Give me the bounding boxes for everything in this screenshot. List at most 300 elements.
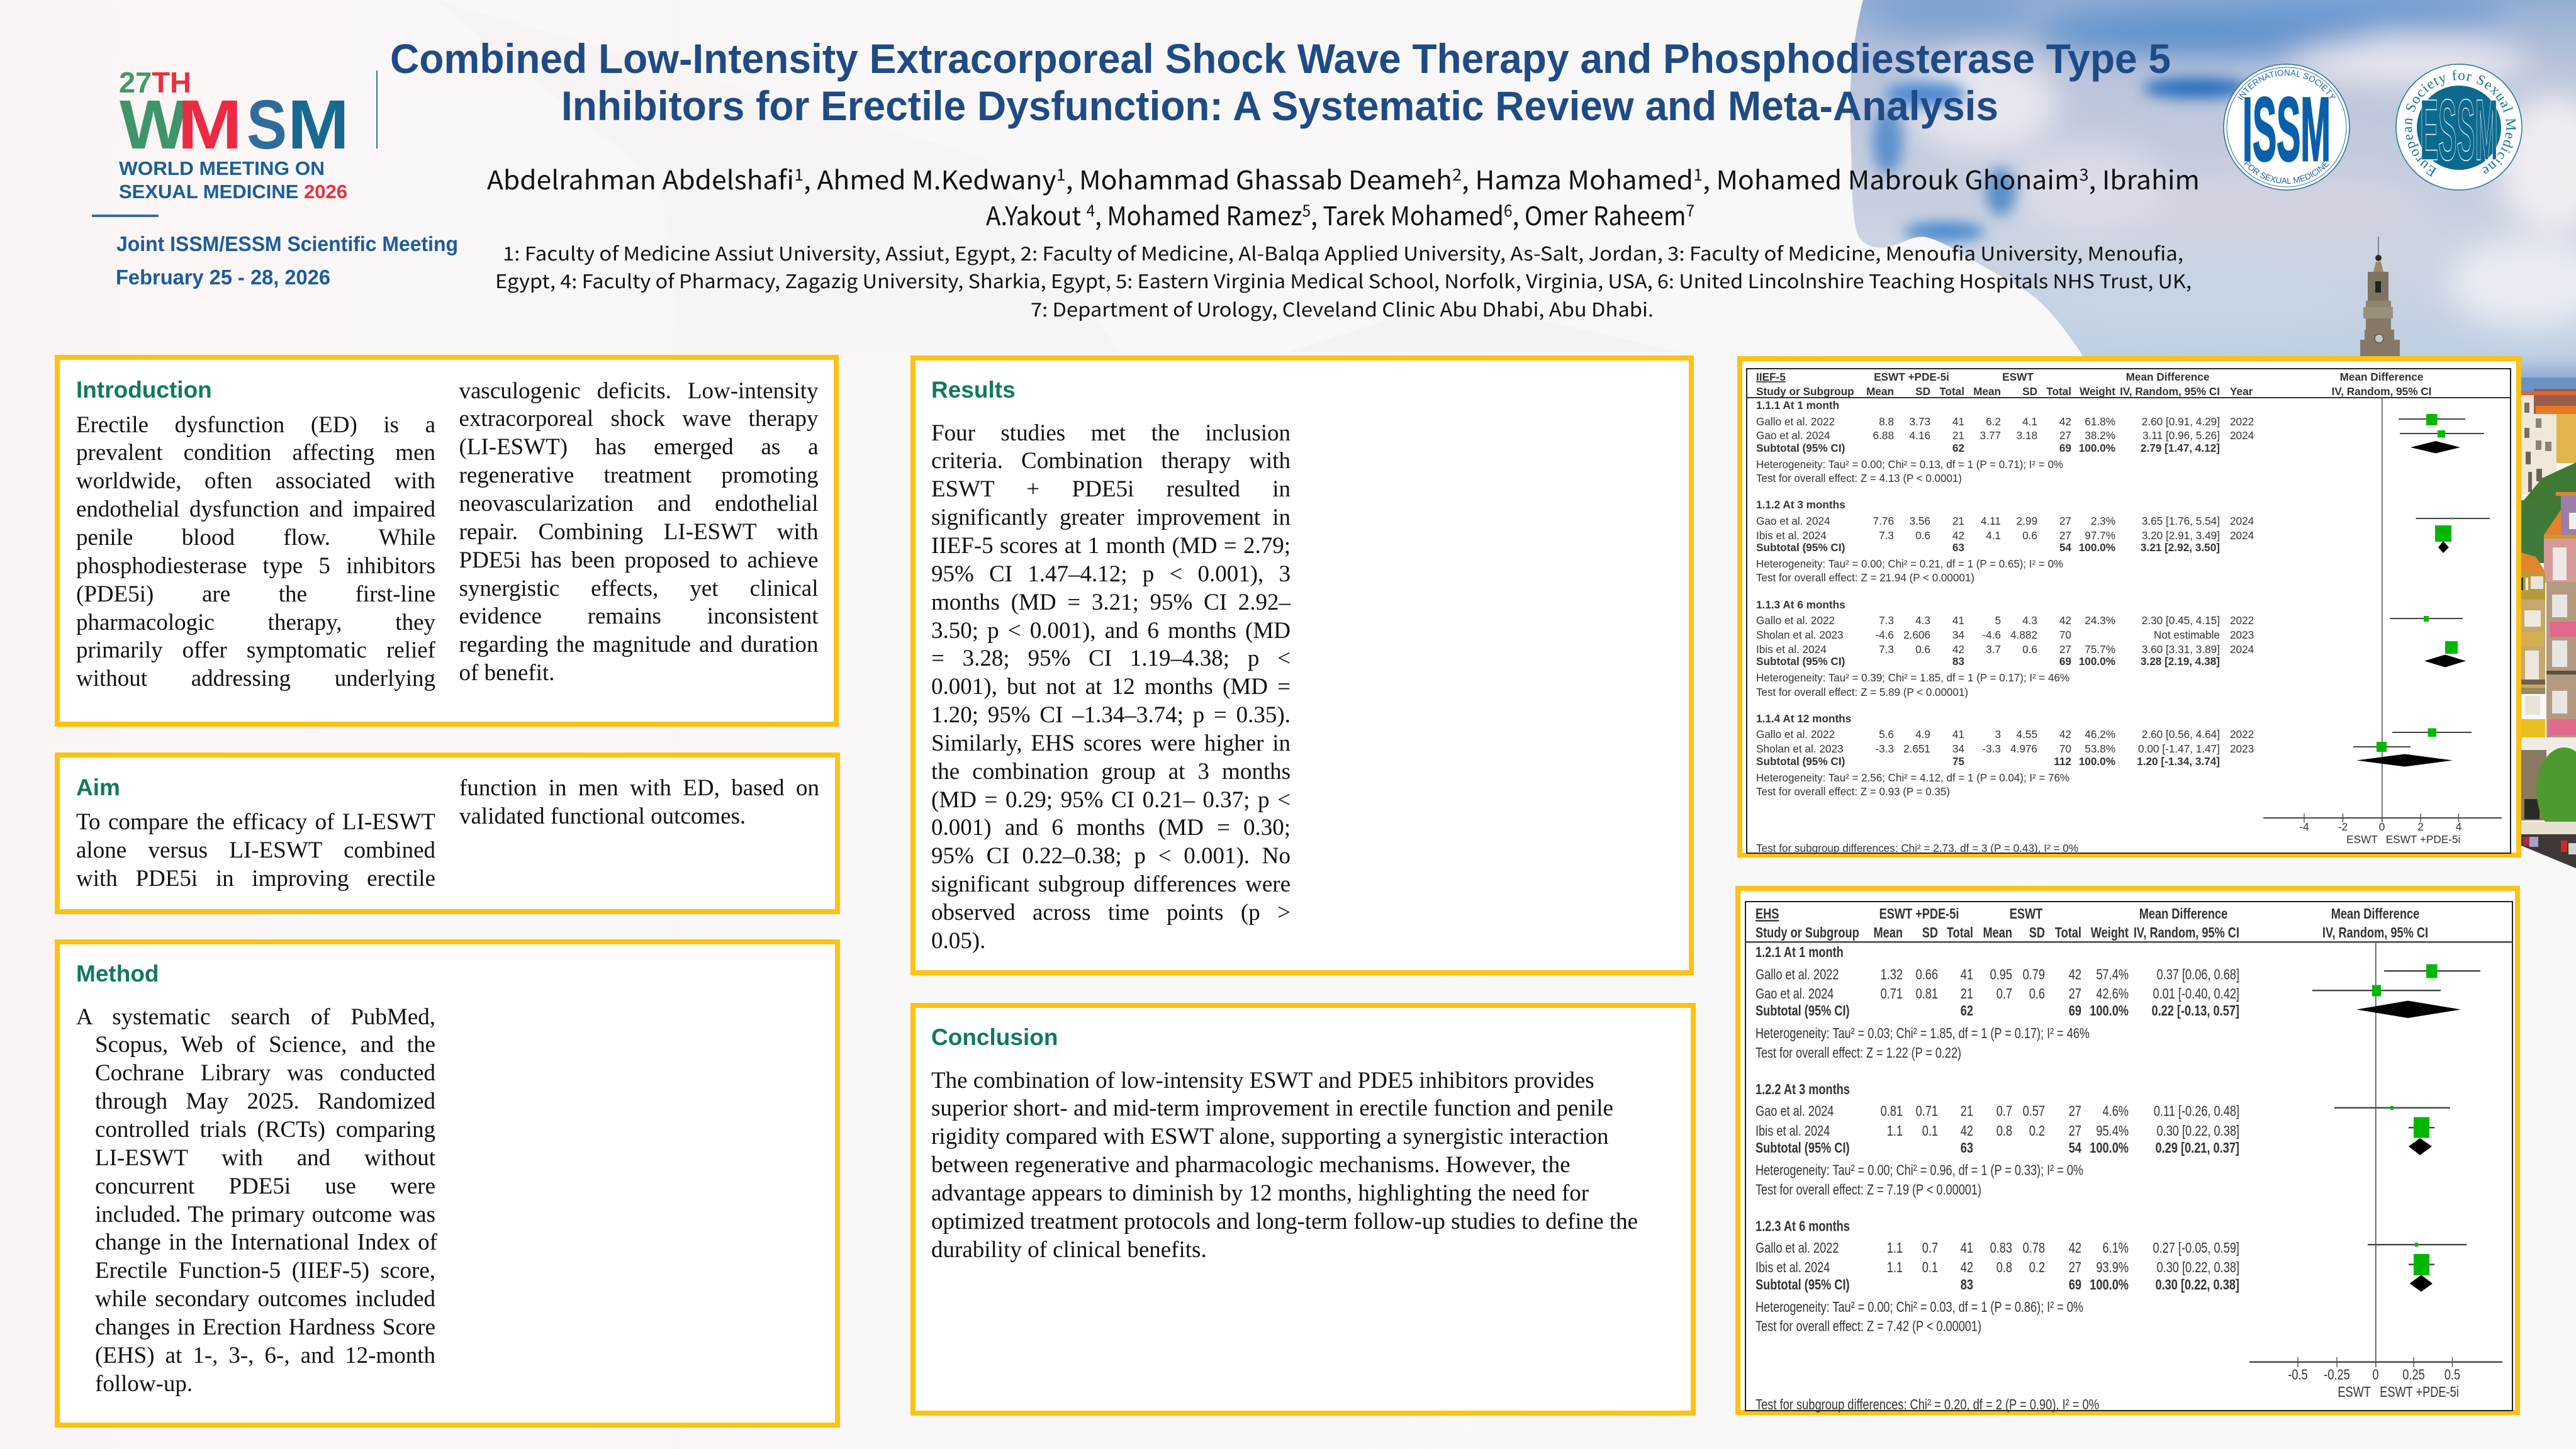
chart axis: -4 bbox=[2299, 820, 2309, 833]
authors: , Mohammad Ghassab Deameh bbox=[1066, 159, 1452, 197]
subgroup: at 1 month bbox=[1756, 399, 2484, 484]
chart axis bbox=[2249, 1357, 2502, 1401]
subgroup: at 3 months: 2024 bbox=[2230, 515, 2254, 527]
subgroup: at 1 month: 69 bbox=[2059, 442, 2071, 454]
subgroup: at 6 months: Subtotal (95% CI) bbox=[1756, 655, 1845, 668]
subgroup: at 12 months: 1.20 [-1.34, 3.74] bbox=[2137, 755, 2220, 768]
authors: Abdelrahman Abdelshafi bbox=[487, 159, 783, 197]
subgroup: at 12 months: 2.651 bbox=[1903, 742, 1930, 755]
text block: method: Scopus, Web of Science, and the bbox=[95, 1032, 435, 1058]
subgroup: at 1 month: Gao et al. 2024 bbox=[1756, 429, 1830, 442]
text block: results bbox=[931, 420, 1291, 954]
subgroup: at 6 months: Subtotal (95% CI) bbox=[1756, 1277, 1850, 1293]
subgroup: at 12 months: 5.6 bbox=[1879, 728, 1894, 741]
subgroup: at 1 month: 100.0% bbox=[2090, 1003, 2129, 1019]
subgroup: at 6 months: 42 bbox=[1952, 643, 1964, 656]
subgroup: at 1 month: 0.22 [-0.13, 0.57] bbox=[2151, 1003, 2239, 1019]
subgroup: at 6 months: 83 bbox=[1961, 1277, 1973, 1293]
subgroup: at 3 months: 21 bbox=[1961, 1103, 1973, 1119]
table header: IV, Random, 95% CI bbox=[2134, 925, 2239, 941]
subgroup: at 12 months: Gallo et al. 2022 bbox=[1756, 728, 1835, 741]
text block: results: 3.50; p < 0.001), and 6 months (MD bbox=[931, 618, 1291, 643]
subgroup: at 6 months: 0.1 bbox=[1922, 1260, 1938, 1276]
table header: SD bbox=[2029, 925, 2045, 941]
chart axis: 4 bbox=[2456, 820, 2462, 833]
subgroup: at 6 months: 1.2.3 At 6 months bbox=[1756, 1218, 1850, 1234]
subgroup: at 6 months: 0.7 bbox=[1922, 1240, 1938, 1256]
subgroup: at 6 months: 2.606 bbox=[1903, 629, 1930, 641]
subgroup: at 1 month: Test for overall effect: Z = 4.13 (P < 0.0001) bbox=[1756, 472, 1962, 484]
subgroup: at 1 month: 6.88 bbox=[1873, 429, 1894, 442]
subgroup: at 3 months: 2.99 bbox=[2017, 515, 2037, 527]
subgroup: at 3 months: 2024 bbox=[2230, 529, 2254, 542]
subgroup: at 6 months: 0.30 [0.22, 0.38] bbox=[2156, 1277, 2239, 1293]
subgroup: at 12 months bbox=[1756, 712, 2472, 798]
subgroup: at 6 months: 70 bbox=[2059, 629, 2071, 641]
authors: A.Yakout bbox=[986, 195, 1087, 233]
subgroup: at 3 months: 97.7% bbox=[2085, 529, 2115, 542]
subgroup: at 3 months: 3.65 [1.76, 5.54] bbox=[2142, 515, 2220, 527]
subgroup: at 1 month: 6.2 bbox=[1986, 415, 2001, 428]
subgroup: at 6 months: 69 bbox=[2059, 655, 2071, 668]
subgroup: at 6 months: 1.1 bbox=[1887, 1260, 1903, 1276]
subgroup: at 1 month: Gallo et al. 2022 bbox=[1756, 966, 1839, 983]
subgroup: at 6 months: 1.1.3 At 6 months bbox=[1756, 598, 1845, 611]
text block: conclusion: optimized treatment protocols and long-term follow-up studies to define the bbox=[931, 1209, 1638, 1234]
table header: Total bbox=[2055, 925, 2081, 941]
title bbox=[390, 35, 2171, 129]
table header: Mean Difference bbox=[2126, 371, 2209, 383]
text block: aim column 1 bbox=[76, 809, 435, 892]
subgroup: at 6 months: 4.3 bbox=[1915, 614, 1930, 627]
text block: results: 0.05). bbox=[931, 928, 985, 954]
subgroup: at 1 month: Subtotal (95% CI) bbox=[1756, 1003, 1850, 1019]
subgroup: at 3 months: Subtotal (95% CI) bbox=[1756, 541, 1845, 554]
subgroup: at 6 months: 27 bbox=[2069, 1260, 2081, 1276]
subgroup: at 12 months: 70 bbox=[2059, 742, 2071, 755]
subgroup: at 1 month: 42 bbox=[2059, 415, 2071, 428]
logo: ISSM bbox=[2223, 64, 2350, 191]
text block: introduction column 2: extracorporeal shock wave therapy bbox=[459, 406, 818, 432]
text block: results: criteria. Combination therapy with bbox=[931, 448, 1291, 474]
subgroup: at 6 months: 100.0% bbox=[2079, 655, 2115, 668]
text block: introduction column 1: without addressing underlying bbox=[76, 666, 435, 691]
text block: introduction column 2: (LI-ESWT) has emerged as a bbox=[459, 434, 818, 460]
subgroup: at 1 month: 21 bbox=[1961, 986, 1973, 1002]
text block: results: significant subgroup differences were bbox=[931, 871, 1291, 897]
chart axis: -2 bbox=[2338, 820, 2348, 833]
subgroup: at 1 month: Gao et al. 2024 bbox=[1756, 986, 1834, 1002]
table header: ESWT +PDE-5i bbox=[1879, 906, 1959, 922]
subgroup: at 12 months: 34 bbox=[1952, 742, 1964, 755]
subgroup: at 3 months: 4.1 bbox=[1986, 529, 2001, 542]
subgroup: at 6 months: 83 bbox=[1952, 655, 1964, 668]
table header: Study or Subgroup bbox=[1756, 925, 1859, 941]
subgroup: at 3 months: 1.1 bbox=[1887, 1123, 1903, 1139]
table header: Mean Difference bbox=[2340, 371, 2423, 383]
heading: results: Results bbox=[931, 377, 1016, 403]
footnote: subgroup differences: Test for subgroup differences: Chi² = 2.73, df = 3 (P = 0.43), I² = 0% bbox=[1756, 842, 2078, 854]
text block: method: controlled trials (RCTs) comparing bbox=[95, 1117, 435, 1143]
text block: introduction column 1: phosphodiesterase type 5 inhibitors bbox=[76, 553, 435, 579]
table header: IIEF-5 bbox=[1756, 371, 1786, 383]
subgroup: at 1 month: 62 bbox=[1961, 1003, 1973, 1019]
logo: 27th WMSM conference: 27TH bbox=[119, 66, 191, 99]
subgroup: at 12 months: 46.2% bbox=[2085, 728, 2115, 741]
subgroup: at 6 months: 0.6 bbox=[2022, 643, 2037, 656]
logo: 27th WMSM conference: M bbox=[177, 86, 242, 164]
subgroup: at 1 month: 42.6% bbox=[2096, 986, 2129, 1002]
chart axis: ESWT +PDE-5i bbox=[2386, 833, 2460, 846]
authors: , Omer Raheem bbox=[1513, 195, 1686, 233]
text block: conclusion: The combination of low-intensity ESWT and PDE5 inhibitors provides bbox=[931, 1068, 1594, 1094]
subgroup: at 1 month: 27 bbox=[2069, 986, 2081, 1002]
chart axis: 0.25 bbox=[2402, 1367, 2425, 1383]
text block: results: Similarly, EHS scores were higher in bbox=[931, 730, 1291, 756]
text block: results: = 3.28; 95% CI 1.19–4.38; p < bbox=[931, 646, 1291, 671]
subgroup: at 1 month: 0.81 bbox=[1916, 986, 1938, 1002]
text block: method: change in the International Index of bbox=[95, 1229, 437, 1255]
subgroup: at 6 months: 75.7% bbox=[2085, 643, 2115, 656]
table header: Mean bbox=[1874, 925, 1903, 941]
affiliations bbox=[495, 238, 2192, 322]
chart axis: 0 bbox=[2379, 820, 2385, 833]
subgroup: at 1 month: 41 bbox=[1952, 415, 1964, 428]
text block: introduction column 1: primarily offer symptomatic relief bbox=[76, 637, 435, 663]
text block: method: through May 2025. Randomized bbox=[95, 1088, 435, 1114]
chart axis: -0.25 bbox=[2324, 1367, 2350, 1383]
table header: SD bbox=[2022, 385, 2037, 398]
subgroup: at 3 months: 21 bbox=[1952, 515, 1964, 527]
subgroup: at 3 months: 27 bbox=[2069, 1123, 2081, 1139]
subgroup: at 12 months: 41 bbox=[1952, 728, 1964, 741]
subgroup: at 3 months: 63 bbox=[1952, 541, 1964, 554]
subgroup: at 3 months: 42 bbox=[1952, 529, 1964, 542]
subgroup: at 6 months: Heterogeneity: Tau² = 0.39; Chi² = 1.85, df = 1 (P = 0.17); I² = 46% bbox=[1756, 671, 2069, 684]
subgroup: at 12 months: Sholan et al. 2023 bbox=[1756, 742, 1844, 755]
subgroup: at 1 month: 38.2% bbox=[2085, 429, 2115, 442]
logo: ISSM: FOR SEXUAL MEDICINE bbox=[2244, 161, 2329, 184]
subgroup: at 3 months: Ibis et al. 2024 bbox=[1756, 1123, 1830, 1139]
subgroup: at 1 month bbox=[1756, 944, 2480, 1061]
text block: results: significantly greater improvement in bbox=[931, 505, 1291, 530]
subgroup: at 1 month: 1.2.1 At 1 month bbox=[1756, 944, 1844, 961]
subgroup: at 6 months: 41 bbox=[1952, 614, 1964, 627]
text block: introduction column 1: Erectile dysfunction (ED) is a bbox=[76, 412, 435, 438]
logo: 27th WMSM conference: M bbox=[288, 86, 349, 164]
logo: 27th WMSM conference: SEXUAL MEDICINE 2026 bbox=[119, 181, 347, 203]
subgroup: at 6 months: 1.1 bbox=[1887, 1240, 1903, 1256]
authors: , Mohamed Mabrouk Ghonaim bbox=[1703, 159, 2079, 197]
table header: IV, Random, 95% CI bbox=[2322, 925, 2428, 941]
subgroup: at 1 month: 27 bbox=[2059, 429, 2071, 442]
table header: Weight bbox=[2080, 385, 2115, 398]
subgroup: at 12 months: 2.60 [0.56, 4.64] bbox=[2142, 728, 2220, 741]
subgroup: at 1 month: 21 bbox=[1952, 429, 1964, 442]
subgroup: at 1 month: 0.66 bbox=[1916, 966, 1938, 983]
logo: 27th WMSM conference bbox=[92, 66, 458, 289]
subgroup: at 6 months: 34 bbox=[1952, 629, 1964, 641]
authors: 5 bbox=[1302, 198, 1311, 221]
text block: method: changes in Erection Hardness Score bbox=[95, 1314, 435, 1340]
header: logos, title, authors and affiliations: ISSM bbox=[2243, 79, 2331, 180]
logo: 27th WMSM conference: February 25 - 28, 2026 bbox=[116, 266, 330, 289]
title: Inhibitors for Erectile Dysfunction: A Systematic Review and Meta-Analysis bbox=[561, 82, 1998, 129]
footnote: subgroup differences: Test for subgroup differences: Chi² = 0.20, df = 2 (P = 0.90), I² = 0% bbox=[1756, 1397, 2099, 1413]
text block: introduction column 1: penile blood flow. While bbox=[76, 525, 435, 551]
subgroup: at 1 month: 3.18 bbox=[2017, 429, 2037, 442]
text block: method bbox=[76, 1004, 437, 1397]
subgroup: at 3 months: 0.11 [-0.26, 0.48] bbox=[2154, 1103, 2239, 1119]
subgroup: at 6 months: 3.60 [3.31, 3.89] bbox=[2142, 643, 2220, 656]
subgroup: at 1 month: 4.1 bbox=[2022, 415, 2037, 428]
subgroup: at 1 month: 1.32 bbox=[1881, 966, 1903, 983]
subgroup: at 1 month: 0.37 [0.06, 0.68] bbox=[2157, 966, 2239, 983]
text block: results: 0.001) and 6 months (MD = 0.30; bbox=[931, 815, 1291, 841]
subgroup: at 12 months: 75 bbox=[1952, 755, 1964, 768]
chart axis bbox=[2263, 814, 2502, 846]
subgroup: at 3 months: 63 bbox=[1961, 1140, 1973, 1156]
subgroup: at 3 months: 54 bbox=[2069, 1140, 2081, 1156]
text block: introduction column 1: worldwide, often associated with bbox=[76, 468, 435, 494]
chart axis: 0.5 bbox=[2444, 1367, 2460, 1383]
authors: , Tarek Mohamed bbox=[1311, 195, 1504, 233]
subgroup: at 3 months: 0.81 bbox=[1881, 1103, 1903, 1119]
subgroup: at 6 months: Ibis et al. 2024 bbox=[1756, 643, 1827, 656]
text block: results: Four studies met the inclusion bbox=[931, 420, 1291, 446]
subgroup: at 6 months: Not estimable bbox=[2154, 629, 2220, 641]
subgroup: at 3 months: 27 bbox=[2059, 515, 2071, 527]
subgroup: at 6 months: -4.6 bbox=[1875, 629, 1894, 641]
text block: conclusion: superior short- and mid-term improvement in erectile function and penile bbox=[931, 1095, 1613, 1121]
subgroup: at 6 months: 24.3% bbox=[2085, 614, 2115, 627]
text block: introduction column 2 bbox=[459, 378, 818, 686]
table header: ESWT bbox=[2010, 906, 2042, 922]
text block: conclusion: between regenerative and pharmacologic mechanisms. However, the bbox=[931, 1152, 1571, 1178]
subgroup: at 1 month: 3.73 bbox=[1910, 415, 1930, 428]
text block: introduction column 1: (PDE5i) are the first-line bbox=[76, 581, 435, 607]
subgroup: at 3 months: 0.6 bbox=[2022, 529, 2037, 542]
subgroup: at 3 months: 0.1 bbox=[1922, 1123, 1938, 1139]
subgroup: at 6 months: 7.3 bbox=[1879, 614, 1894, 627]
authors: 2 bbox=[1452, 162, 1462, 186]
subgroup: at 6 months: 4.3 bbox=[2022, 614, 2037, 627]
subgroup: at 1 month: Test for overall effect: Z = 1.22 (P = 0.22) bbox=[1756, 1045, 1961, 1061]
text block: results: months (MD = 3.21; 95% CI 2.92– bbox=[931, 590, 1291, 615]
table header: EHS bbox=[1756, 906, 1779, 922]
subgroup: at 12 months: 2023 bbox=[2230, 742, 2254, 755]
subgroup: at 6 months: Test for overall effect: Z = 7.42 (P < 0.00001) bbox=[1756, 1318, 1981, 1334]
panel: method bbox=[55, 939, 840, 1428]
text block: method: (EHS) at 1-, 3-, 6-, and 12-month bbox=[95, 1343, 435, 1368]
table header: Year bbox=[2230, 385, 2253, 398]
subgroup: at 1 month: 61.8% bbox=[2085, 415, 2115, 428]
subgroup: at 3 months: Gao et al. 2024 bbox=[1756, 515, 1830, 527]
authors: , Mohamed Ramez bbox=[1095, 195, 1302, 233]
authors: 6 bbox=[1504, 198, 1513, 221]
subgroup: at 12 months: 4.55 bbox=[2017, 728, 2037, 741]
text block: method: A systematic search of PubMed, bbox=[76, 1004, 435, 1030]
authors: 1 bbox=[794, 162, 804, 186]
table header: Mean Difference bbox=[2331, 906, 2419, 922]
subgroup: at 6 months: 69 bbox=[2069, 1277, 2081, 1293]
authors: 1 bbox=[1056, 162, 1066, 186]
subgroup: at 1 month: 42 bbox=[2069, 966, 2081, 983]
subgroup: at 6 months: 0.83 bbox=[1990, 1240, 2012, 1256]
text block: results: ESWT + PDE5i resulted in bbox=[931, 476, 1291, 502]
subgroup: at 1 month: 0.95 bbox=[1990, 966, 2012, 983]
subgroup: at 3 months: Test for overall effect: Z = 21.94 (P < 0.00001) bbox=[1756, 571, 1974, 584]
subgroup: at 1 month: 100.0% bbox=[2079, 442, 2115, 454]
table header: SD bbox=[1915, 385, 1930, 398]
text block: results: IIEF-5 scores at 1 month (MD = 2.79; bbox=[931, 533, 1291, 559]
subgroup: at 6 months: 42 bbox=[2069, 1240, 2081, 1256]
subgroup: at 1 month: Heterogeneity: Tau² = 0.00; Chi² = 0.13, df = 1 (P = 0.71); I² = 0% bbox=[1756, 458, 2063, 471]
subgroup: at 6 months: 0.6 bbox=[1915, 643, 1930, 656]
table header: Weight bbox=[2091, 925, 2129, 941]
subgroup: at 12 months: 53.8% bbox=[2085, 742, 2115, 755]
subgroup: at 3 months: 2.3% bbox=[2091, 515, 2115, 527]
subgroup: at 3 months bbox=[1756, 1082, 2450, 1198]
subgroup: at 3 months: Test for overall effect: Z = 7.19 (P < 0.00001) bbox=[1756, 1182, 1981, 1198]
panel: IIEF-5 forest plot bbox=[1737, 356, 2521, 858]
logo: 27th WMSM conference: W bbox=[120, 86, 188, 164]
panel: EHS forest plot bbox=[1735, 886, 2520, 1415]
logo: ISSM: INTERNATIONAL SOCIETY bbox=[2237, 69, 2336, 101]
subgroup: at 6 months: Gallo et al. 2022 bbox=[1756, 1240, 1839, 1256]
text block: introduction column 2: vasculogenic deficits. Low-intensity bbox=[459, 378, 818, 404]
subgroup: at 6 months: Ibis et al. 2024 bbox=[1756, 1260, 1830, 1276]
subgroup: at 1 month: 8.8 bbox=[1879, 415, 1894, 428]
text block: method: concurrent PDE5i use were bbox=[95, 1173, 435, 1199]
subgroup: at 3 months: 7.3 bbox=[1879, 529, 1894, 542]
subgroup: at 3 months: Ibis et al. 2024 bbox=[1756, 529, 1827, 542]
subgroup: at 12 months: 4.9 bbox=[1915, 728, 1930, 741]
subgroup: at 6 months: 4.882 bbox=[2010, 629, 2037, 641]
subgroup: at 1 month: 0.7 bbox=[1996, 986, 2012, 1002]
text block: method: Cochrane Library was conducted bbox=[95, 1060, 435, 1086]
subgroup: at 12 months: 4.976 bbox=[2010, 742, 2037, 755]
table header: ESWT +PDE-5i bbox=[1874, 371, 1949, 383]
text block: introduction column 1: prevalent condition affecting men bbox=[76, 440, 435, 466]
subgroup: at 6 months: 27 bbox=[2059, 643, 2071, 656]
subgroup: at 12 months: Heterogeneity: Tau² = 2.56; Chi² = 4.12, df = 1 (P = 0.04); I² = 76% bbox=[1756, 771, 2069, 784]
subgroup: at 1 month: Subtotal (95% CI) bbox=[1756, 442, 1845, 454]
affiliations: 1: Faculty of Medicine Assiut University, Assiut, Egypt, 2: Faculty of Medicine, Al-Balqa Applied University, As-Salt, Jordan, 3: Faculty of Medicine, Menoufia University, Menoufia, bbox=[503, 238, 2183, 266]
subgroup: at 6 months: 3.7 bbox=[1986, 643, 2001, 656]
text block: aim column 1: with PDE5i in improving erectile bbox=[76, 866, 435, 892]
subgroup: at 12 months: -3.3 bbox=[1982, 742, 2001, 755]
table header: ESWT bbox=[2002, 371, 2034, 383]
subgroup: at 3 months: 0.57 bbox=[2023, 1103, 2045, 1119]
subgroup: at 6 months: 100.0% bbox=[2090, 1277, 2129, 1293]
title: Combined Low-Intensity Extracorporeal Shock Wave Therapy and Phosphodiesterase Type 5 bbox=[390, 35, 2171, 82]
text block: method: Erectile Function-5 (IIEF-5) score, bbox=[95, 1258, 435, 1284]
subgroup: at 1 month: 0.6 bbox=[2029, 986, 2045, 1002]
authors: 7 bbox=[1686, 198, 1694, 221]
subgroup: at 6 months: 42 bbox=[2059, 614, 2071, 627]
subgroup: at 1 month: 2.60 [0.91, 4.29] bbox=[2142, 415, 2220, 428]
subgroup: at 6 months: 0.2 bbox=[2029, 1260, 2045, 1276]
icon: clock tower bbox=[2360, 237, 2400, 356]
subgroup: at 1 month: 3.11 [0.96, 5.26] bbox=[2142, 429, 2220, 442]
subgroup: at 6 months: 2022 bbox=[2230, 614, 2254, 627]
subgroup: at 3 months: 0.71 bbox=[1916, 1103, 1938, 1119]
subgroup: at 3 months: Gao et al. 2024 bbox=[1756, 1103, 1834, 1119]
text block: results: 0.001), but not at 12 months (MD = bbox=[931, 674, 1291, 700]
subgroup: at 6 months bbox=[1756, 598, 2466, 698]
authors: , Ibrahim bbox=[2088, 159, 2200, 197]
subgroup: at 12 months: 100.0% bbox=[2079, 755, 2115, 768]
subgroup: at 6 months: 41 bbox=[1961, 1240, 1973, 1256]
chart axis: ESWT +PDE-5i bbox=[2380, 1384, 2459, 1401]
subgroup: at 3 months: 0.30 [0.22, 0.38] bbox=[2157, 1123, 2239, 1139]
text block: method: while secondary outcomes included bbox=[95, 1286, 435, 1312]
table header: SD bbox=[1922, 925, 1938, 941]
text block: results: 95% CI 0.22–0.38; p < 0.001). No bbox=[931, 843, 1291, 869]
subgroup: at 6 months: 42 bbox=[1961, 1260, 1973, 1276]
subgroup: at 3 months: Heterogeneity: Tau² = 0.00; Chi² = 0.96, df = 1 (P = 0.33); I² = 0% bbox=[1756, 1162, 2083, 1178]
text block: results: 95% CI 1.47–4.12; p < 0.001), 3 bbox=[931, 561, 1291, 587]
subgroup: at 6 months: 0.27 [-0.05, 0.59] bbox=[2153, 1240, 2239, 1256]
authors: 4 bbox=[1087, 198, 1095, 221]
subgroup: at 3 months: 27 bbox=[2059, 529, 2071, 542]
text block: aim column 2 bbox=[459, 775, 819, 829]
subgroup: at 3 months: 0.6 bbox=[1915, 529, 1930, 542]
text block: introduction column 2: PDE5i has been proposed to achieve bbox=[459, 547, 818, 573]
table header bbox=[1756, 906, 2428, 941]
subgroup: at 1 month: Gallo et al. 2022 bbox=[1756, 415, 1835, 428]
background: page tint, sky with clouds, clock tower and Porto buildings bbox=[1850, 0, 2576, 868]
chart axis: 0 bbox=[2372, 1367, 2379, 1383]
authors bbox=[487, 159, 2200, 233]
text block: introduction column 2: synergistic effects, yet clinical bbox=[459, 575, 818, 601]
subgroup: at 12 months: 42 bbox=[2059, 728, 2071, 741]
panel: introduction bbox=[55, 355, 839, 727]
subgroup: at 3 months: 100.0% bbox=[2090, 1140, 2129, 1156]
logo: 27th WMSM conference: S bbox=[247, 86, 287, 164]
subgroup: at 3 months: 54 bbox=[2059, 541, 2071, 554]
subgroup: at 12 months: 0.00 [-1.47, 1.47] bbox=[2138, 742, 2220, 755]
panel: results bbox=[910, 355, 1694, 975]
chart axis: ESWT bbox=[2338, 1384, 2371, 1401]
chart axis: ESWT bbox=[2346, 833, 2378, 846]
text block: introduction column 1: pharmacologic therapy, they bbox=[76, 609, 435, 635]
subgroup: at 3 months: 0.7 bbox=[1996, 1103, 2012, 1119]
subgroup: at 12 months: Subtotal (95% CI) bbox=[1756, 755, 1845, 768]
table header: Total bbox=[1939, 385, 1964, 398]
subgroup: at 1 month: 62 bbox=[1952, 442, 1964, 454]
subgroup: at 1 month: 4.16 bbox=[1910, 429, 1930, 442]
subgroup: at 3 months: 0.8 bbox=[1996, 1123, 2012, 1139]
text block: conclusion: durability of clinical benefits. bbox=[931, 1237, 1207, 1263]
text block: aim column 1: alone versus LI-ESWT combined bbox=[76, 837, 435, 863]
logo: 27th WMSM conference: Joint ISSM/ESSM Scientific Meeting bbox=[116, 232, 458, 255]
subgroup: at 1 month: Heterogeneity: Tau² = 0.03; Chi² = 1.85, df = 1 (P = 0.17); I² = 46% bbox=[1756, 1026, 2090, 1042]
subgroup: at 3 months: 3.56 bbox=[1910, 515, 1930, 527]
subgroup: at 3 months: Heterogeneity: Tau² = 0.00; Chi² = 0.21, df = 1 (P = 0.65); I² = 0% bbox=[1756, 557, 2063, 570]
subgroup: at 3 months: 4.6% bbox=[2103, 1103, 2129, 1119]
subgroup: at 3 months: 1.2.2 At 3 months bbox=[1756, 1082, 1850, 1098]
subgroup: at 6 months: 6.1% bbox=[2103, 1240, 2129, 1256]
subgroup: at 6 months: 93.9% bbox=[2096, 1260, 2129, 1276]
subgroup: at 1 month: 1.1.1 At 1 month bbox=[1756, 399, 1839, 411]
subgroup: at 1 month: 2024 bbox=[2230, 429, 2254, 442]
subgroup: at 1 month: 3.77 bbox=[1980, 429, 2001, 442]
heading: method: Method bbox=[76, 961, 159, 987]
table header: IV, Random, 95% CI bbox=[2120, 385, 2220, 398]
subgroup: at 3 months bbox=[1756, 498, 2490, 584]
